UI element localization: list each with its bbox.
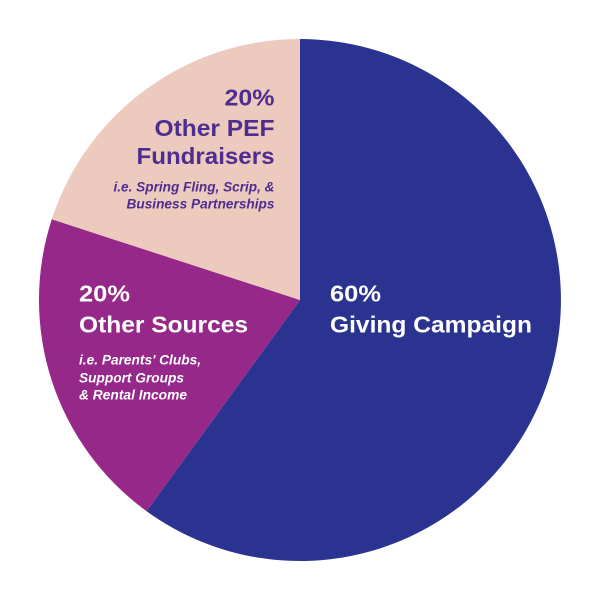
slice: Other Sources 20% bbox=[39, 219, 300, 511]
label: Giving Campaign: 60% bbox=[330, 280, 381, 306]
slice: Other PEF Fundraisers 20% bbox=[52, 39, 300, 300]
label: Giving Campaign bbox=[330, 280, 532, 338]
label: Other PEF Fundraisers: Fundraisers bbox=[136, 143, 274, 169]
label: Other Sources: Support Groups bbox=[79, 370, 184, 386]
slice: Giving Campaign 60% bbox=[147, 39, 561, 561]
label: Other PEF Fundraisers: Other PEF bbox=[154, 115, 274, 141]
label: Other Sources: & Rental Income bbox=[79, 388, 187, 402]
label: Other Sources bbox=[79, 280, 248, 402]
label: Other PEF Fundraisers: 20% bbox=[224, 84, 274, 110]
label: Other PEF Fundraisers: i.e. Spring Fling, Scrip, & bbox=[114, 180, 274, 194]
label: Other Sources: i.e. Parents' Clubs, bbox=[79, 352, 201, 368]
label: Giving Campaign: Giving Campaign bbox=[330, 312, 532, 338]
label: Other Sources: Other Sources bbox=[79, 312, 248, 338]
label: Other Sources: 20% bbox=[79, 280, 130, 306]
label: Other PEF Fundraisers bbox=[114, 84, 275, 212]
label: Other PEF Fundraisers: Business Partnerships bbox=[126, 196, 275, 212]
